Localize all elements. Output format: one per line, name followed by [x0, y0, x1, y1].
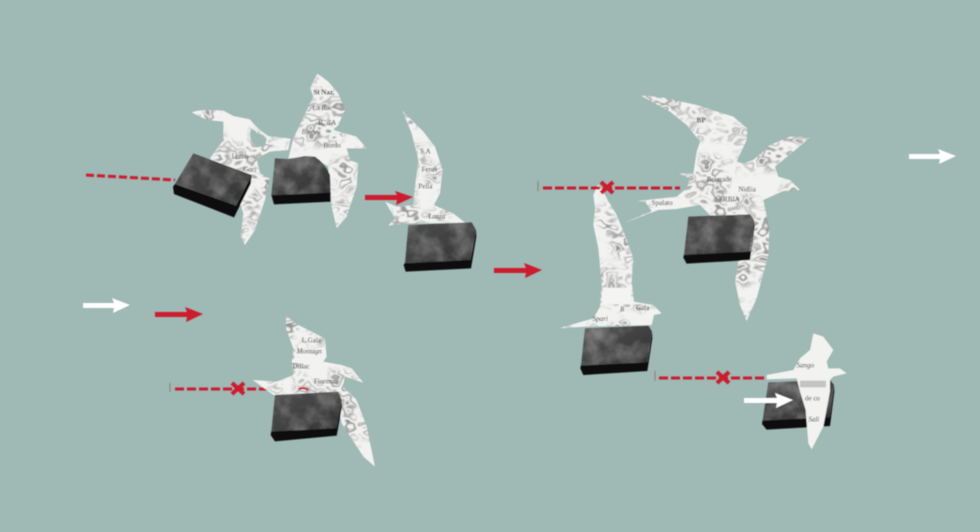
bird 4: [623, 95, 810, 321]
bird 3: Lanza: [427, 212, 446, 220]
bird 3: S.A: [420, 147, 431, 155]
bird 7: Montagn: [296, 347, 322, 355]
bird 7: [253, 315, 375, 467]
bird 2: St Naz.: [313, 88, 335, 96]
bird 3: Pella: [418, 182, 432, 190]
bird 5: Spari: [593, 315, 608, 323]
bird 7: Dillac: [293, 362, 310, 370]
red arrow 3: [155, 307, 203, 322]
dashed route 1: [86, 175, 175, 180]
bird 4: SERBIA: [715, 196, 740, 204]
dashed route 3: [170, 383, 312, 392]
suitcase 1: [173, 153, 252, 217]
bird 2: R. d'A: [318, 119, 336, 127]
bird 3: [385, 111, 465, 226]
bird 5: R: [619, 306, 625, 314]
bird 2: Biscay: [302, 128, 321, 136]
suitcase 7: [271, 392, 342, 441]
red cross 1: [601, 182, 613, 193]
bird 2: Bordo: [323, 141, 341, 149]
dashed route 4: [655, 371, 768, 381]
bird 4: Spalato: [652, 199, 673, 207]
bird 5: Gala: [636, 304, 649, 312]
bird 6 with suitcase: [762, 333, 847, 449]
dashed route 2: [538, 181, 680, 191]
white arrow 3: [744, 393, 793, 408]
bird 4: Belgrade: [707, 176, 732, 184]
suitcase 6: [762, 380, 834, 430]
bird 6: Sango: [797, 361, 815, 369]
bird 7: Fiorenz: [314, 377, 335, 385]
red arrow 1: [365, 191, 413, 205]
red cross 3: [717, 372, 729, 383]
red cross 2: [232, 383, 244, 394]
bird 6: [767, 333, 847, 449]
bird 3: Fenel: [422, 166, 437, 174]
white arrow 1: [83, 298, 130, 313]
bird 4: Nidlia: [738, 186, 756, 194]
bird 7 with suitcase: [253, 315, 375, 467]
suitcase 4: [683, 214, 755, 264]
bird group: two birds flying left: [173, 73, 367, 245]
bird 1: Lorris: [232, 152, 249, 160]
white arrow 2: [909, 149, 956, 164]
bird 1: Gori: [243, 166, 256, 174]
bird 4 and bird 5 with suitcases: [558, 95, 810, 375]
bird 2: [288, 73, 367, 228]
bird 6: de co: [805, 395, 820, 403]
suitcase 5: [580, 326, 652, 375]
bird 1: [192, 110, 291, 245]
bird 5: [558, 184, 662, 328]
bird 2: La Roc: [312, 104, 333, 112]
bird 7: L.Gala: [302, 337, 321, 345]
bird 6: Sali: [808, 416, 819, 424]
suitcase 2: [271, 156, 331, 204]
bird 4: BP: [697, 116, 706, 124]
bird 3 with suitcase: [385, 111, 476, 272]
suitcase 3: [404, 222, 476, 272]
red arrow 2: [494, 263, 542, 278]
